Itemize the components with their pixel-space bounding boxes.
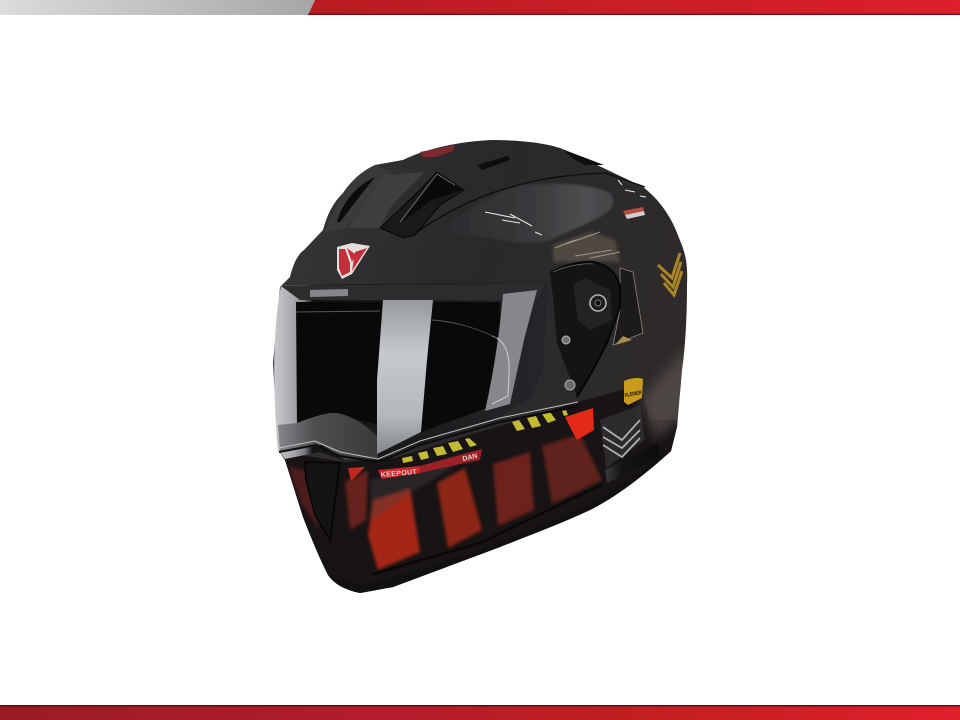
- chin left patch: [288, 466, 320, 530]
- inner dark lens: [296, 302, 506, 440]
- scoop dark opening: [402, 175, 462, 222]
- chin vent: [305, 462, 340, 540]
- artwork dark base: [280, 390, 678, 593]
- top bar: red segment: [308, 0, 960, 15]
- smoke diagonal overlay: [370, 466, 455, 520]
- red banner with text: [378, 466, 420, 479]
- white highlight scratches: [485, 180, 646, 235]
- small top vent: [477, 156, 510, 170]
- striped side decal: [623, 207, 645, 219]
- visor hinge plate: [550, 262, 620, 397]
- red patch 2: [437, 468, 482, 548]
- lower hinge screws: [562, 336, 570, 344]
- red banner second: DAN: [462, 453, 478, 463]
- rear top vent: [562, 149, 604, 165]
- bottom bar: [0, 705, 960, 720]
- hinge detail: [573, 278, 612, 330]
- cheek vent bar: [605, 442, 660, 483]
- visor lower rim: [279, 402, 578, 459]
- yellow hazard stripes: [402, 410, 568, 463]
- side window graphic: [437, 184, 613, 243]
- yellow label: KLEINER: [624, 390, 642, 399]
- band highlight: [310, 289, 348, 297]
- lens top line: [296, 311, 497, 338]
- visor: [274, 282, 578, 462]
- helmet shell: [273, 140, 687, 593]
- lens lower smoke tint: [278, 413, 378, 460]
- red patch 5: [345, 470, 368, 530]
- top bar: grey segment: [0, 0, 315, 15]
- visor upper band: [281, 283, 545, 300]
- central vent scoop: [380, 172, 464, 238]
- side lower grey sheen: [637, 350, 684, 440]
- red patch 4: [542, 434, 602, 504]
- gold chevrons: [658, 253, 682, 295]
- hinge screw: [590, 295, 606, 311]
- visor clear outer: [274, 282, 548, 461]
- top vent slot: [337, 177, 375, 222]
- top vent left: [323, 165, 392, 233]
- helmet logo: [337, 243, 370, 279]
- chevron backing: [600, 405, 645, 468]
- mechanical circuit graphic: [553, 232, 620, 262]
- right visor reflection: [485, 290, 537, 411]
- shell seam line: [417, 173, 645, 232]
- red banner left: [348, 467, 365, 481]
- gold triangle mark: [615, 336, 632, 345]
- silver chevrons: [603, 420, 640, 457]
- pinlock edge: [492, 336, 509, 404]
- red patch 3: [493, 452, 534, 526]
- scoop highlight: [400, 174, 455, 222]
- ribbed vent cover: [348, 172, 425, 228]
- dark rear panel: [613, 268, 643, 345]
- chin band line: [373, 484, 603, 574]
- red patch 1: [368, 488, 420, 570]
- bright red block: [565, 408, 594, 440]
- vertical light reflection: [377, 300, 433, 454]
- red banner second: [420, 449, 482, 473]
- helmet: [270, 140, 700, 600]
- chin bottom trim: [320, 450, 680, 600]
- red top logo: [420, 145, 455, 157]
- lower red artwork: [280, 350, 684, 593]
- yellow label: [624, 378, 643, 405]
- red banner with text: KEEPOUT: [381, 469, 418, 479]
